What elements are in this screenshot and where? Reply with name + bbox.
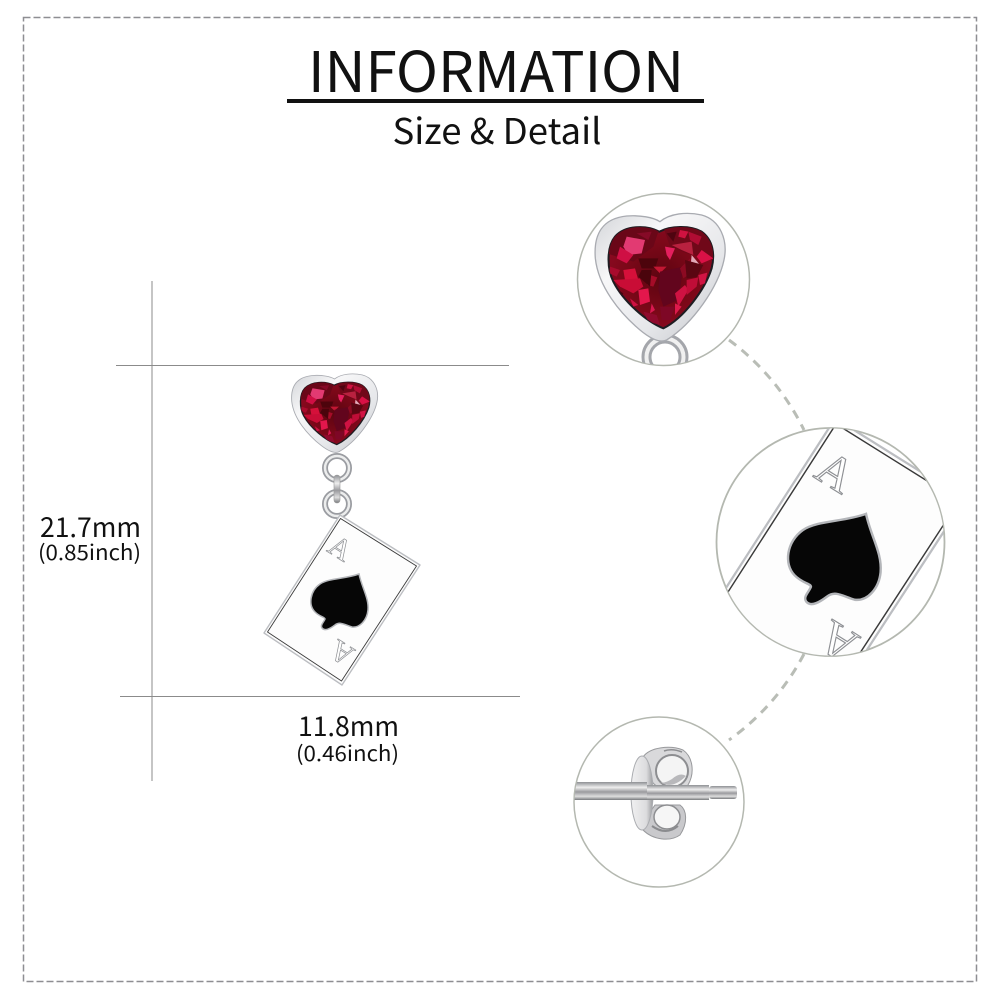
detail circle: ace of spades xyxy=(716,427,946,657)
dimension guide lines xyxy=(116,281,520,781)
dashed connector arc xyxy=(729,340,804,740)
title: INFORMATION xyxy=(308,28,684,109)
width label: 11.8mm xyxy=(298,705,399,744)
thick post xyxy=(574,782,647,800)
height label: (0.85inch) xyxy=(38,537,141,567)
subtitle: Size & Detail xyxy=(392,104,602,155)
detail circle: heart stone xyxy=(578,194,750,376)
upper butterfly loop xyxy=(643,747,692,791)
detail circle: butterfly ear back xyxy=(574,717,744,887)
width label xyxy=(296,705,399,768)
main earring xyxy=(264,374,420,685)
height label xyxy=(38,506,141,567)
butterfly disc xyxy=(631,756,653,830)
jump rings and link xyxy=(325,456,349,516)
post tip xyxy=(709,786,737,799)
lower butterfly loop xyxy=(643,805,686,839)
thin post xyxy=(647,785,709,800)
height label: 21.7mm xyxy=(40,506,141,545)
heart ruby stud xyxy=(292,374,378,452)
width label: (0.46inch) xyxy=(296,738,399,768)
ace of spades card xyxy=(264,515,420,685)
title underline xyxy=(287,99,704,103)
